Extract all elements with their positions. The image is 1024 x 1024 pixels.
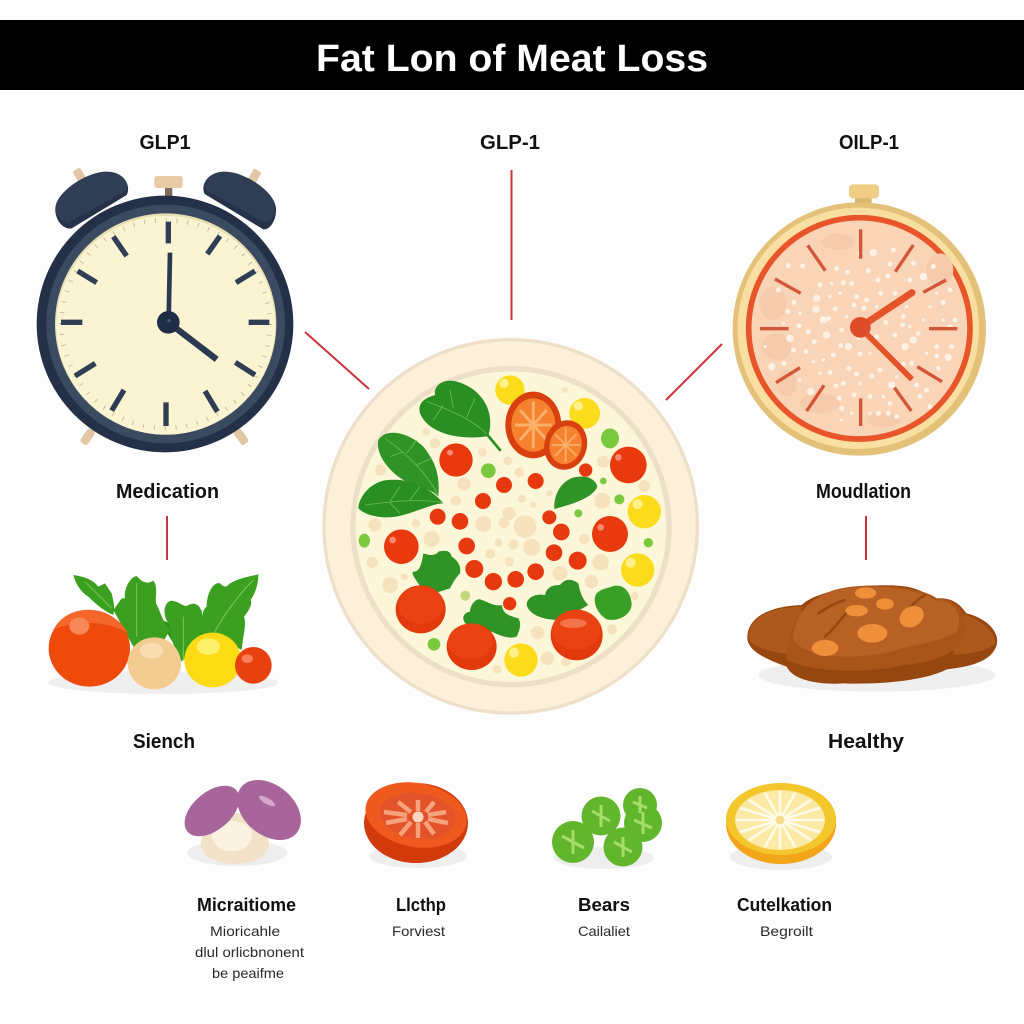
title banner: Fat Lon of Meat Loss xyxy=(316,38,708,80)
text: Micraitiome: Micraitiome xyxy=(197,895,296,915)
heading: OILP-1 right: OILP-1 xyxy=(839,132,899,154)
icon: lemon slice xyxy=(726,783,836,870)
icon: peach stopwatch clock xyxy=(733,184,986,456)
icon: brown meat xyxy=(747,585,997,692)
text: Micraitiome: be peaifme xyxy=(212,965,284,981)
title banner xyxy=(0,20,1024,90)
text: Llcthp: Llcthp xyxy=(396,895,446,915)
text: Bears xyxy=(578,895,630,939)
spinach leaves xyxy=(358,381,597,517)
cherry tomatoes xyxy=(384,443,647,564)
heading: GLP-1 center: GLP-1 xyxy=(480,132,540,154)
beige grains xyxy=(367,387,650,674)
text: Micraitiome: dlul orlicbnonent xyxy=(195,944,304,960)
text: Bears: Bears xyxy=(578,895,630,915)
text: Llcthp: Forviest xyxy=(392,923,445,939)
label: Medication: Medication xyxy=(116,481,219,503)
text: Bears: Cailaliet xyxy=(578,923,630,939)
label: Siench: Siench xyxy=(133,731,195,753)
icon: tomato half xyxy=(360,775,472,868)
text: Cutelkation: Begroilt xyxy=(760,923,813,939)
big tomatoes with leaves xyxy=(396,551,632,670)
text: Micraitiome xyxy=(195,895,304,981)
text: Cutelkation: Cutelkation xyxy=(737,895,832,915)
yellow tomatoes xyxy=(495,375,661,677)
label: Moudlation: Moudlation xyxy=(816,481,911,503)
green peas xyxy=(359,428,653,651)
tomato slices xyxy=(505,392,593,475)
text: Cutelkation xyxy=(737,895,832,939)
text: Micraitiome: Mioricahle xyxy=(210,923,280,939)
icon: dark alarm clock xyxy=(37,167,293,452)
icon: mushroom xyxy=(175,768,313,866)
heading: GLP1 left: GLP1 xyxy=(140,132,190,154)
icon: plate of vegetables xyxy=(324,340,697,713)
label: Healthy: Healthy xyxy=(828,731,905,753)
connector lines xyxy=(167,170,866,560)
icon: vegetable group xyxy=(48,574,278,694)
small red berries xyxy=(430,463,592,610)
icon: green beans xyxy=(552,788,662,869)
text: Llcthp xyxy=(392,895,446,939)
